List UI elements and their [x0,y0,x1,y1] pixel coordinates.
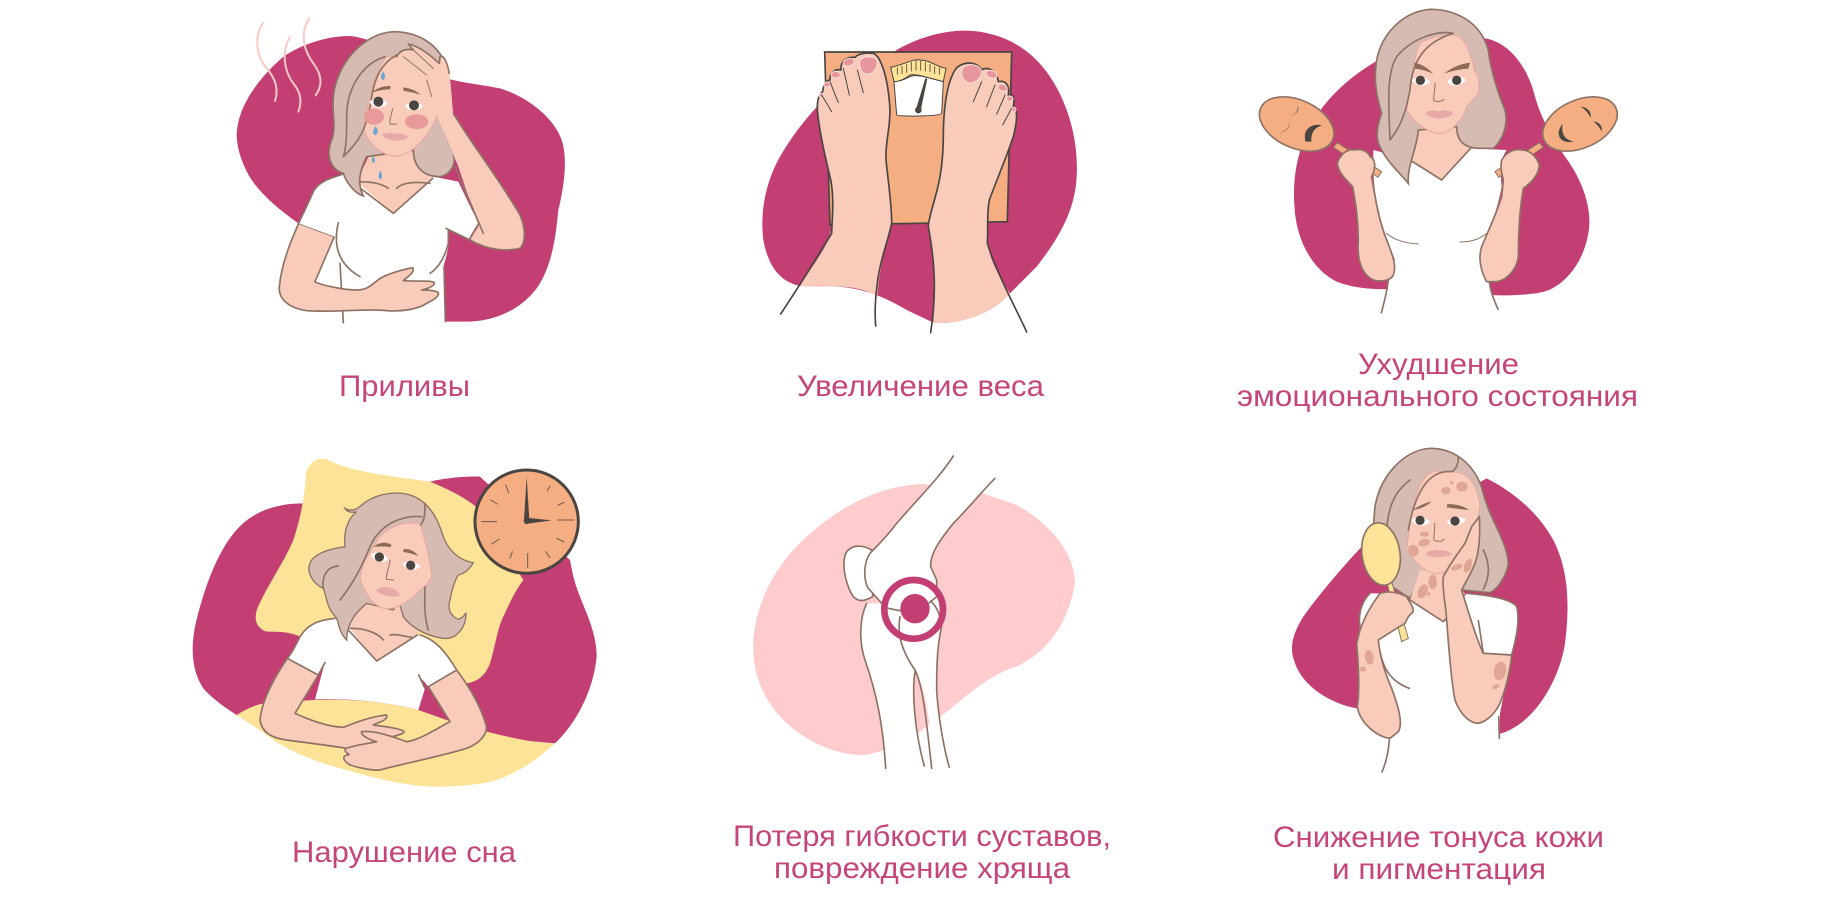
background blob [193,477,597,743]
neckline [1410,148,1471,180]
neck [348,600,418,662]
shirt outlines [298,174,448,323]
face [360,523,432,609]
shirt [298,174,478,322]
neckline [358,178,433,213]
panel: skin tone and pigmentation illustration [1292,448,1568,773]
background blob [1294,38,1589,295]
right paddle mask [1495,86,1626,177]
brows, nose, lips [1414,63,1470,118]
left foot [800,53,892,297]
left fist [1337,150,1395,281]
patella [844,546,873,601]
heat waves [257,19,321,112]
scale [825,52,1012,225]
shirt [1357,593,1518,773]
lower arm and hand [279,224,438,311]
eyes [1412,76,1466,86]
panel: weight gain illustration [762,31,1077,333]
finger lines [403,50,433,97]
shirt outlines [1381,281,1498,313]
target ring [884,580,943,639]
spots on left arm [1360,649,1375,672]
brows, nose, lips [1413,502,1469,557]
face [1407,35,1479,133]
right arm [344,670,486,770]
pillow [256,459,523,683]
background blob [1292,478,1568,734]
eyes [369,97,423,110]
background blob [753,484,1075,755]
arm outline [397,44,524,250]
mirror [1358,520,1408,642]
neck and chest [357,147,433,213]
hair strand [1389,33,1453,140]
face [1407,472,1480,574]
caption: emotional state: эмоционального состояния [1237,380,1638,413]
leg bones [861,456,995,768]
shirt outlines [287,618,457,688]
caption: sleep disorder: Нарушение сна [292,836,516,869]
neckline [1410,600,1455,622]
fibula gap [914,672,929,733]
hair strand [343,55,397,157]
lower arm outline [279,224,438,311]
caption: hot flashes: Приливы [339,370,470,403]
panel: knee joint illustration [753,456,1075,768]
neck [1410,570,1465,622]
right fist [1480,150,1539,282]
hair strands [323,503,428,630]
left arm [260,658,404,748]
blush [364,109,428,129]
background blob [237,36,565,322]
background blob [762,31,1077,323]
caption: skin: Снижение тонуса кожи [1273,821,1604,854]
left arm with hand [1357,592,1413,738]
shirt [287,618,457,710]
caption: joints [733,820,1111,885]
panel: sleep disorder illustration [193,459,597,787]
brows, nose, lips [373,543,418,597]
right toes [962,65,1016,125]
caption: emotional state [1237,348,1638,413]
neck [1410,127,1472,180]
left foot outline [781,53,892,326]
dial [891,60,946,116]
caption: skin [1273,821,1604,886]
neckline [348,628,417,661]
caption: skin: и пигментация [1332,853,1546,886]
hair [309,493,473,640]
left paddle mask [1251,86,1382,177]
panel: hot flashes illustration [237,19,565,323]
caption: joints: Потеря гибкости суставов, [733,820,1111,853]
panel: emotional state illustration [1251,9,1626,313]
hair [1375,9,1506,183]
right arm with hand [1443,517,1512,723]
left toes [819,57,877,112]
hair [1373,448,1508,598]
shirt [1373,148,1507,313]
caption: weight gain: Увеличение веса [797,370,1044,403]
bone outlines [861,456,995,768]
hair [329,32,454,196]
sweat drops [372,71,385,179]
caption: emotional state: Ухудшение [1358,348,1519,381]
shirt outlines [1359,593,1518,772]
brows, nose, lips [372,86,421,141]
blanket [237,700,555,787]
clock [475,470,578,573]
raised arm and hand [397,44,524,250]
eyes [371,552,421,570]
right foot [928,63,1016,323]
right foot outline [928,63,1027,333]
caption: joints: повреждение хряща [774,852,1070,885]
pigmentation spots [1406,481,1468,600]
eyes [1412,516,1466,526]
hair strand [1387,457,1488,589]
face [363,57,440,156]
spots on right arm [1450,558,1508,690]
